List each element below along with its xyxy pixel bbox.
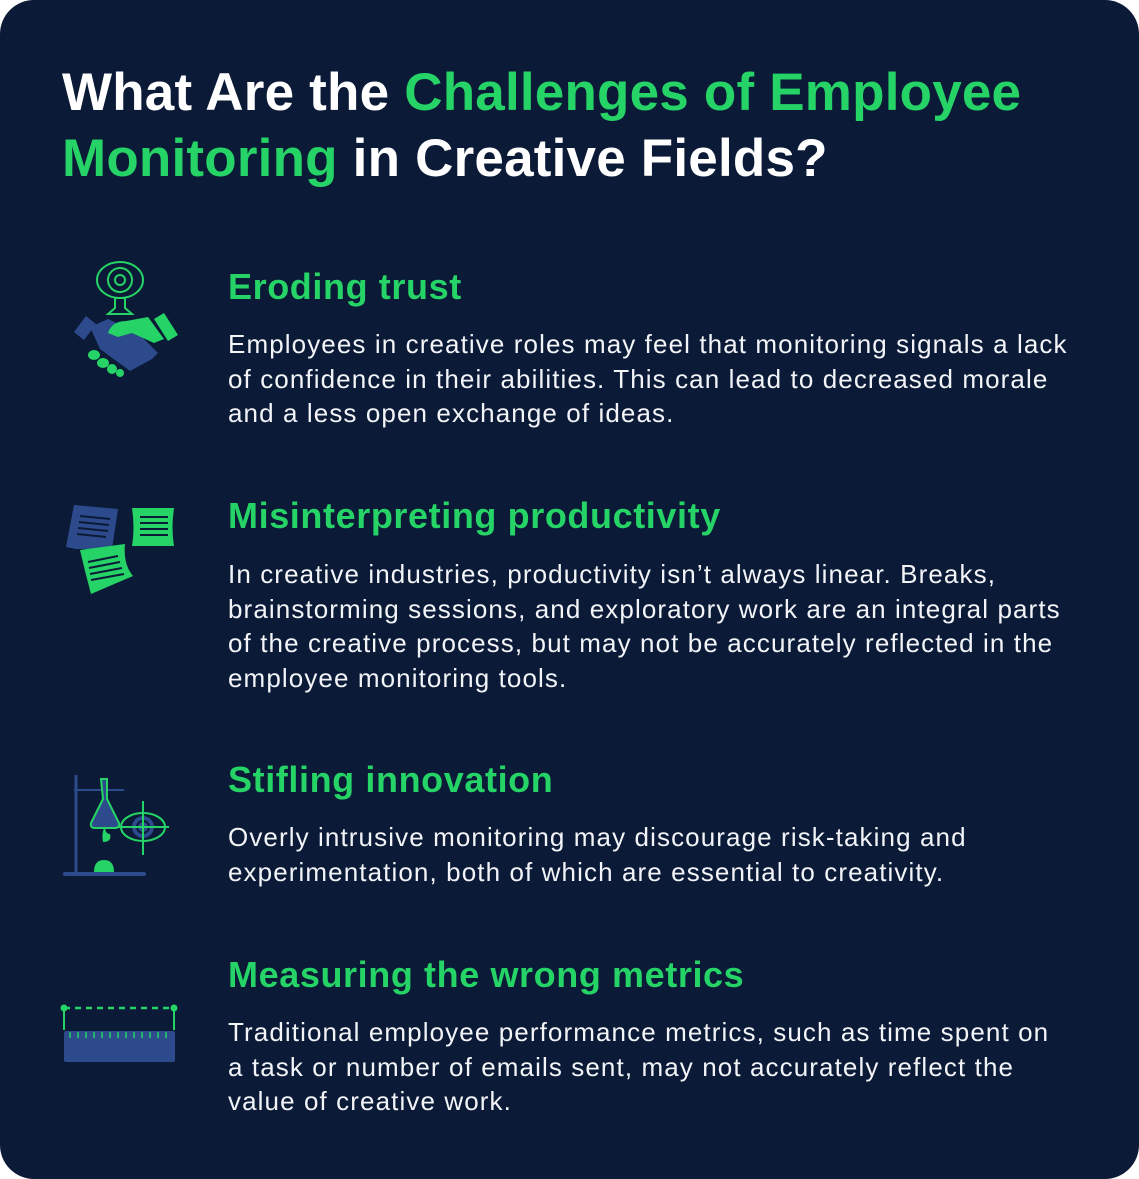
text: stifling innovation — [228, 822, 967, 886]
heading: measuring the wrong metrics: Measuring the wrong metrics — [228, 954, 744, 995]
text: stifling innovation: experimentation, both of which are essential to creativity. — [228, 856, 944, 886]
text: stifling innovation: Overly intrusive monitoring may discourage risk-taking and — [228, 822, 967, 852]
text: misinterpreting productivity — [228, 559, 1061, 692]
heading: misinterpreting productivity: Misinterpreting productivity — [228, 495, 721, 536]
text: eroding trust: of confidence in their abilities. This can lead to decreased morale — [228, 364, 1048, 394]
text: measuring the wrong metrics — [228, 1017, 1049, 1116]
text: misinterpreting productivity: brainstorming sessions, and exploratory work are an integral parts — [228, 594, 1061, 624]
text: measuring the wrong metrics: a task or number of emails sent, may not accurately reflect the — [228, 1052, 1014, 1082]
title — [62, 63, 1021, 188]
text: misinterpreting productivity: employee monitoring tools. — [228, 662, 567, 692]
text: eroding trust — [228, 329, 1068, 428]
text: eroding trust: Employees in creative roles may feel that monitoring signals a lack — [228, 329, 1068, 359]
icon: notes — [66, 505, 174, 594]
text: measuring the wrong metrics: Traditional employee performance metrics, such as time spent on — [228, 1017, 1049, 1047]
text: misinterpreting productivity: of the creative process, but may not be accurately reflected in the — [228, 628, 1053, 658]
title: What Are the Challenges of Employee — [62, 63, 1021, 122]
text: measuring the wrong metrics: value of creative work. — [228, 1086, 512, 1116]
icon: lab and eye — [63, 775, 169, 876]
text: eroding trust: and a less open exchange of ideas. — [228, 398, 674, 428]
text: misinterpreting productivity: In creative industries, productivity isn’t always linear. Breaks, — [228, 559, 996, 589]
heading: stifling innovation: Stifling innovation — [228, 759, 553, 800]
heading: eroding trust: Eroding trust — [228, 266, 462, 307]
title: Monitoring in Creative Fields? — [62, 129, 828, 188]
icon: webcam handshake — [74, 261, 178, 377]
icon: ruler — [60, 1004, 178, 1062]
